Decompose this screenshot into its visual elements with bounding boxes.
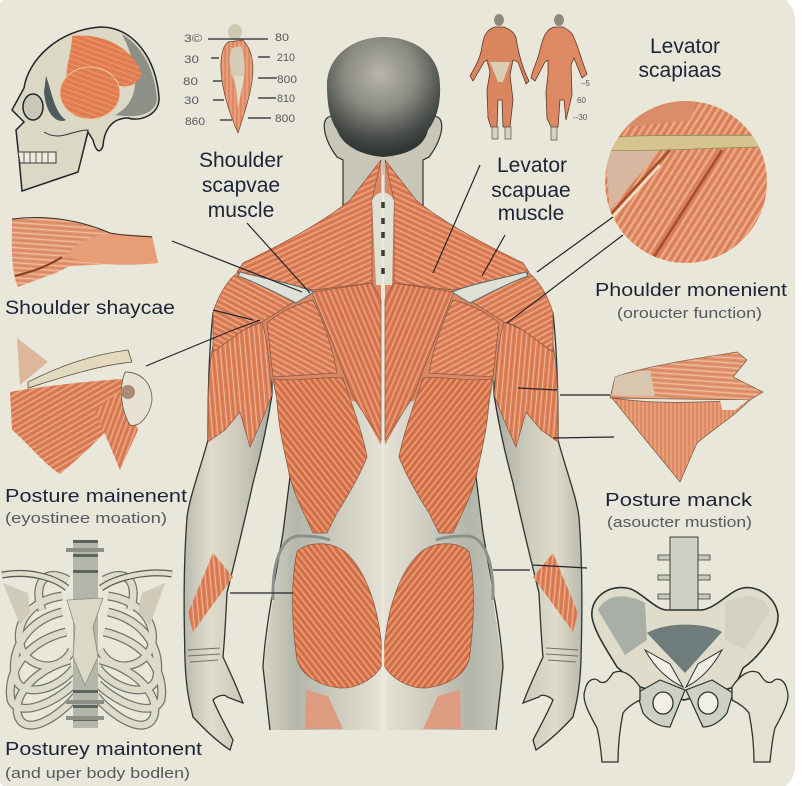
icon: skull with temporal muscle: [12, 27, 159, 191]
pelvic opening: [645, 650, 722, 687]
label: shoulder shaycae: Shoulder shaycae: [5, 298, 175, 319]
icon: triangular muscle inset: [610, 352, 763, 482]
chart: small muscle diagram with number scale: 810: [277, 93, 295, 105]
label: levator scapuae muscle: scapuae: [491, 179, 571, 202]
spine nodes: [381, 202, 385, 274]
label: posture manck: Posture manck: [605, 490, 753, 510]
label: shoulder scapvae muscle: muscle: [208, 199, 274, 222]
right muscles: [383, 160, 578, 729]
left femur: [584, 671, 640, 762]
chart: small muscle diagram with number scale: 30: [184, 95, 199, 107]
sacrum: [647, 625, 722, 673]
upper arm muscle: [208, 322, 272, 447]
infraspinatus: [267, 300, 337, 377]
gluteus: [292, 544, 383, 688]
upper trapezius: [237, 160, 381, 290]
chart: small muscle diagram with number scale: 30: [184, 54, 199, 66]
chart: small muscle diagram with number scale: 210: [277, 52, 295, 64]
left arm: [184, 313, 272, 750]
back muscle backing: [225, 160, 381, 445]
forearm muscle: [188, 553, 233, 632]
label: levator scapiaas: scapiaas: [639, 59, 721, 82]
label: oroucter function: (oroucter function): [617, 305, 762, 322]
icon: pelvis: [584, 537, 788, 762]
label: levator scapuae muscle: [491, 154, 571, 225]
ilium wings and sacrum base: [592, 588, 778, 700]
label: eyostinee moation: (eyostinee moation): [5, 510, 167, 527]
icon: two small full-body muscle figures: [470, 14, 590, 140]
right iliac shading: [725, 596, 770, 650]
right arm: [494, 313, 582, 750]
label: levator scapuae muscle: Levator: [497, 154, 567, 177]
lower trapezius: [312, 283, 381, 440]
label: posture mainenent: Posture mainenent: [5, 486, 187, 506]
label: posturey maintonent: Posturey maintonent: [5, 739, 202, 759]
icon: two small full-body muscle figures: --30: [573, 113, 588, 122]
label: shoulder scapvae muscle: Shoulder: [199, 149, 283, 172]
icon: magnified muscle circle: [605, 101, 767, 263]
chart: small muscle diagram with number scale: 80: [275, 32, 289, 44]
label: levator scapiaas: [639, 35, 721, 82]
label: levator scapiaas: Levator: [650, 35, 720, 58]
torso skin: [263, 380, 503, 730]
left muscles: [188, 160, 383, 729]
label: asoucter mustion: (asoucter mustion): [607, 514, 752, 531]
chart: small muscle diagram with number scale: [183, 24, 297, 133]
latissimus: [273, 378, 367, 533]
iliac crest: [273, 536, 330, 600]
obturator holes: [653, 692, 673, 714]
head hair: [327, 37, 440, 157]
icon: shoulder joint inset: [10, 338, 152, 474]
pubic bones: [637, 680, 733, 727]
label: shoulder scapvae muscle: [199, 149, 283, 222]
label: and uper body bodlen: (and uper body bodlen): [5, 765, 190, 782]
chart: small muscle diagram with number scale: 860: [185, 116, 205, 128]
spine pale area: [372, 192, 394, 285]
label: levator scapuae muscle: muscle: [498, 202, 564, 225]
icon: rib cage: [2, 540, 172, 728]
torso outlines: [263, 400, 503, 730]
callout leader lines: [146, 165, 623, 593]
scapular ridge: [238, 272, 314, 303]
spine processes: [658, 555, 710, 599]
lumbar spine: [670, 537, 698, 613]
left iliac shading: [598, 596, 647, 655]
ears and neck: [324, 116, 442, 205]
wrist band: [188, 648, 220, 662]
spine line: [382, 175, 384, 672]
icon: two small full-body muscle figures: 60: [577, 96, 586, 105]
chart: small muscle diagram with number scale: 800: [275, 113, 295, 125]
label: phoulder monenient: Phoulder monenient: [595, 280, 787, 300]
icon: muscle band inset: [12, 217, 158, 287]
chart: small muscle diagram with number scale: 80: [183, 76, 198, 88]
figure: central back muscle anatomy: [184, 37, 582, 750]
chart: small muscle diagram with number scale: 3©: [184, 33, 202, 45]
thigh muscle: [305, 690, 343, 729]
icon: two small full-body muscle figures: –5: [581, 79, 590, 88]
deltoid: [213, 273, 310, 352]
right femur: [732, 671, 788, 762]
chart: small muscle diagram with number scale: 800: [277, 74, 297, 86]
label: shoulder scapvae muscle: scapvae: [202, 174, 280, 197]
